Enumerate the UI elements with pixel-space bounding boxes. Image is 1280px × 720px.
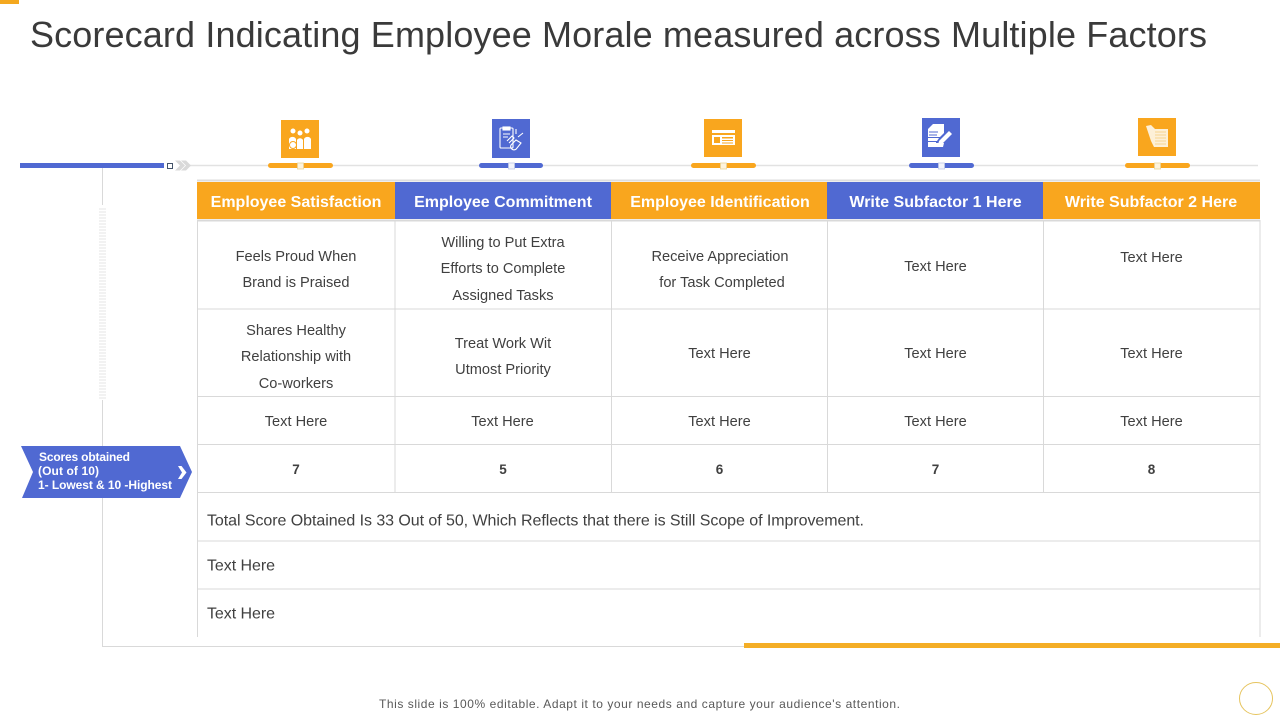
slider: subfactor 1: [909, 163, 974, 169]
summary row: Total Score Obtained Is 33 Out of 50, Which Reflects that there is Still Scope of Improvement.: [207, 512, 864, 530]
row 1: for Task Completed: [659, 275, 785, 291]
row 3: Text Here: [471, 414, 534, 430]
text row 2: Text Here: [207, 558, 275, 574]
row 1: [236, 235, 1183, 304]
scores row: 7: [292, 462, 300, 477]
table header: Write Subfactor 2 Here: [1065, 194, 1237, 211]
top accent bar: [0, 0, 19, 4]
row 2: Text Here: [1120, 346, 1183, 362]
timeline rail: [20, 160, 1258, 170]
callout: scores obtained: (Out of 10): [38, 464, 99, 478]
scores row: 6: [716, 462, 724, 477]
row 2: Text Here: [904, 346, 967, 362]
table header: [197, 180, 1260, 219]
table header: Employee Identification: [630, 194, 810, 211]
row 1: Text Here: [904, 259, 967, 275]
scores row: [292, 462, 1156, 477]
icon: employee satisfaction: [281, 120, 319, 158]
callout: scores obtained: [21, 446, 192, 498]
scores row: 5: [499, 462, 507, 477]
scorecard table: [197, 180, 1260, 637]
icon: subfactor 1: [922, 118, 960, 157]
icon: employee identification: [704, 119, 742, 157]
slider: subfactor 2: [1125, 163, 1190, 169]
icon: employee commitment: [492, 119, 530, 158]
page number circle: [1240, 682, 1272, 714]
slider: employee commitment: [479, 163, 543, 169]
left frame lines: [99, 168, 745, 647]
icon: subfactor 2: [1138, 118, 1176, 156]
callout: scores obtained: Scores obtained: [39, 450, 130, 464]
row 3: Text Here: [1120, 414, 1183, 430]
row 3: Text Here: [904, 414, 967, 430]
row 2: Co-workers: [259, 376, 333, 392]
footer note: This slide is 100% editable. Adapt it to your needs and capture your audience's attention.: [379, 697, 900, 711]
row 2: Treat Work Wit: [455, 336, 551, 352]
row 1: Text Here: [1120, 250, 1183, 266]
row 1: Brand is Praised: [242, 275, 350, 291]
bottom accent bar: [744, 643, 1280, 648]
table header: Employee Commitment: [414, 194, 593, 211]
row 1: Assigned Tasks: [452, 288, 554, 304]
text row 3: Text Here: [207, 606, 275, 622]
scores row: 7: [932, 462, 939, 477]
scores row: 8: [1148, 462, 1156, 477]
table grid: [197, 220, 1260, 637]
row 1: Efforts to Complete: [441, 261, 565, 277]
row 1: Willing to Put Extra: [441, 235, 566, 251]
slider: employee satisfaction: [268, 163, 333, 169]
table header: Write Subfactor 1 Here: [849, 194, 1022, 211]
title: Scorecard Indicating Employee Morale measured across Multiple Factors: [30, 14, 1207, 55]
row 1: Feels Proud When: [236, 249, 356, 265]
row 2: Relationship with: [241, 349, 351, 365]
table header: Employee Satisfaction: [211, 194, 381, 211]
row 2: Text Here: [688, 346, 751, 362]
row 3: Text Here: [688, 414, 751, 430]
row 3: [265, 414, 1183, 430]
callout: scores obtained: 1- Lowest & 10 -Highest: [38, 478, 172, 492]
row 2: Utmost Priority: [455, 362, 552, 378]
row 2: Shares Healthy: [246, 323, 347, 339]
row 2: [241, 323, 1183, 392]
row 1: Receive Appreciation: [651, 249, 789, 265]
row 3: Text Here: [265, 414, 327, 430]
slider: employee identification: [691, 163, 756, 169]
